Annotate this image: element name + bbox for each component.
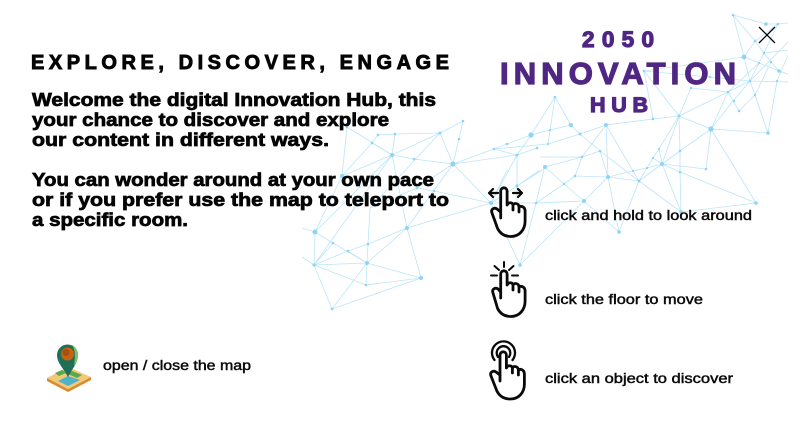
label: open / close the map: open / close the map [103,358,251,373]
navigation text [32,169,449,230]
intro text [32,89,436,150]
label: click the floor: click the floor to move [545,292,703,307]
title: 2050 Innovation Hub logo: HUB [590,93,648,117]
label: click and hold: click and hold to look around [545,208,752,223]
icon: hand with look-around arrows [489,188,525,236]
navigation text: a specific room. [32,209,188,230]
title: 2050 Innovation Hub logo [500,27,736,117]
navigation text: You can wonder around at your own pace [32,169,434,190]
intro text: your chance to discover and explore [32,109,389,130]
intro text: our content in different ways. [32,129,329,150]
title: 2050 Innovation Hub logo: INNOVATION [500,56,736,91]
icon: hand with touch rings [491,341,524,399]
close button [759,27,775,43]
background network graphic [302,14,788,310]
heading: EXPLORE, DISCOVER, ENGAGE [31,52,449,74]
label: click an object: click an object to discover [545,371,734,386]
icon: map pin [47,344,91,392]
title: 2050 Innovation Hub logo: 2050 [582,27,654,52]
intro text: Welcome the digital Innovation Hub, this [32,89,436,110]
navigation text: or if you prefer use the map to teleport to [32,189,449,210]
icon: hand with tap rays [491,262,525,316]
